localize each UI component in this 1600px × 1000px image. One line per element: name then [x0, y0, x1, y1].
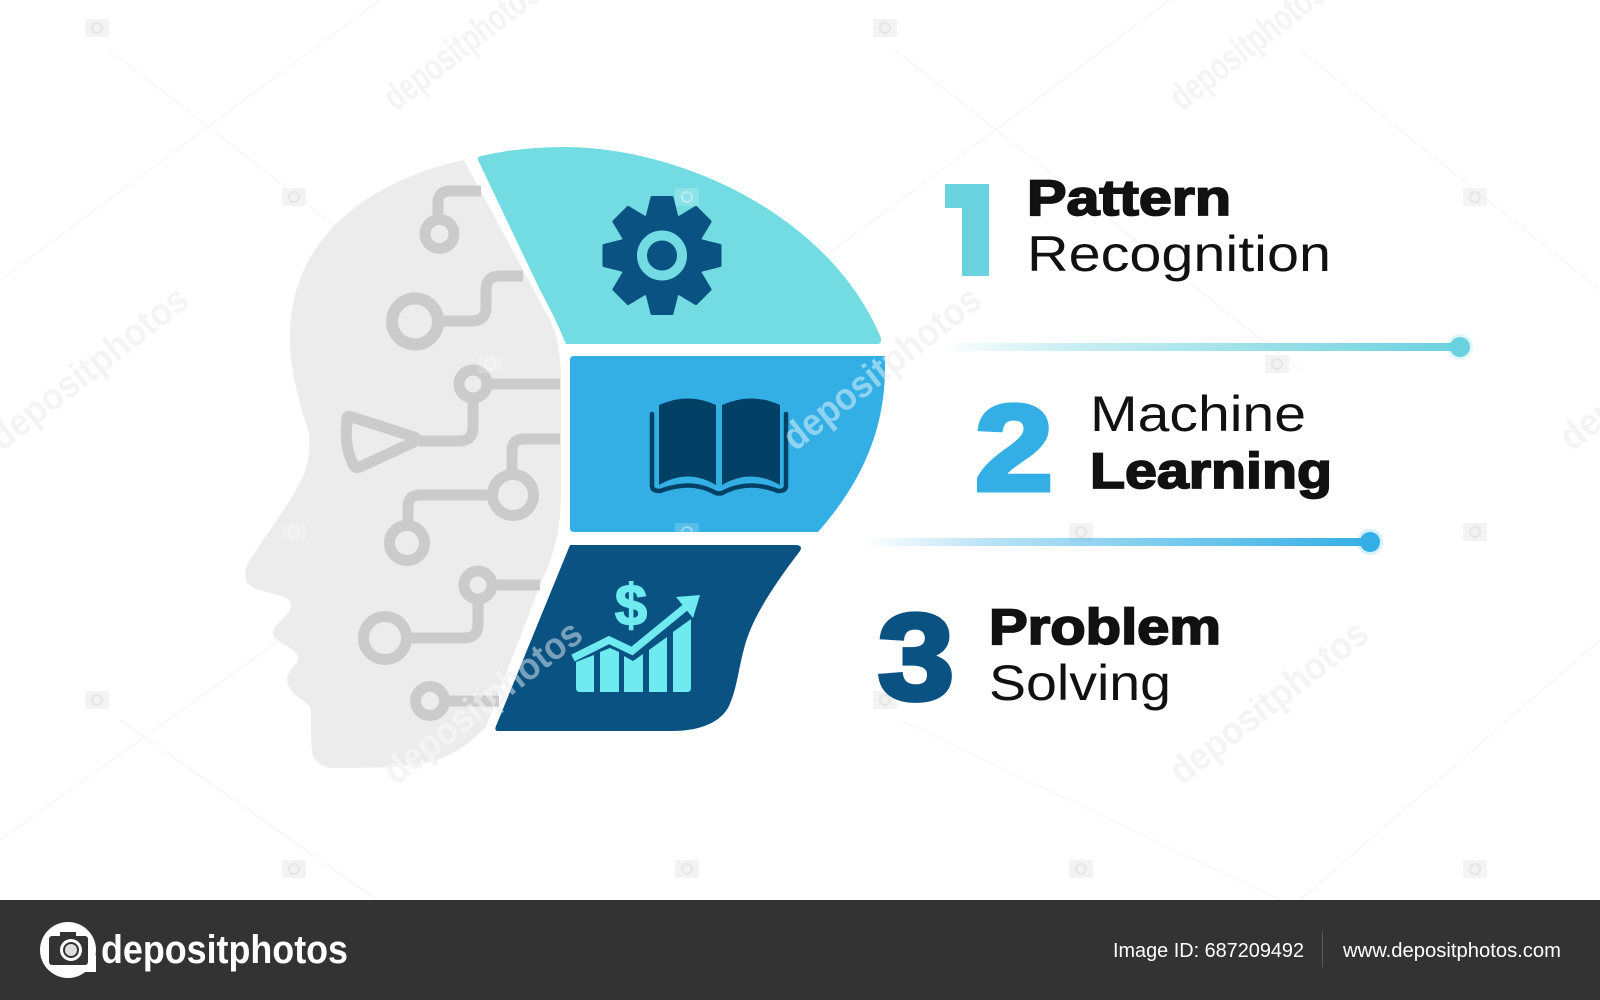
item 3: Problem Solving — [878, 589, 1221, 725]
item 1: Pattern Recognition — [945, 180, 1328, 282]
panel 1: teal — [478, 147, 881, 344]
label 2: Learning — [1090, 443, 1332, 499]
circuit traces — [346, 191, 560, 716]
label 2 — [1090, 386, 1332, 499]
label 3 — [989, 599, 1221, 711]
label 1: Recognition — [1027, 226, 1331, 282]
grey head silhouette with circuit — [245, 160, 561, 768]
website: www.depositphotos.com — [1342, 940, 1561, 962]
panel 3: dark blue — [495, 545, 801, 731]
watermark over panels: depositphotos — [775, 278, 990, 459]
number 1: 1 — [933, 161, 1005, 304]
label 1 — [1027, 170, 1331, 282]
head shape — [245, 160, 561, 768]
label 1: Pattern — [1027, 170, 1231, 226]
label 2: Machine — [1090, 386, 1306, 442]
watermark pattern: depositphotos — [1162, 612, 1377, 793]
footer logo wordmark: depositphotos — [101, 928, 348, 972]
label 3: Problem — [989, 599, 1221, 655]
watermark over panels: depositphotos — [376, 612, 591, 793]
icon: dollar growth chart — [573, 573, 700, 692]
icon: gear — [604, 198, 720, 314]
divider line 1 with dot — [936, 334, 1473, 360]
divider line 2 with dot — [862, 529, 1383, 555]
footer logo icon — [40, 922, 96, 978]
watermark pattern: depositphotos — [775, 278, 990, 459]
image id: Image ID: 687209492 — [1113, 940, 1304, 962]
icon: open book — [652, 398, 786, 494]
label 3: Solving — [989, 655, 1171, 711]
number 3: 3 — [878, 589, 954, 725]
watermark over panels — [282, 188, 990, 793]
footer bar — [0, 900, 1600, 1000]
number 2: 2 — [975, 380, 1053, 516]
watermark pattern: depositphotos — [376, 612, 591, 793]
icon: dollar growth chart: $ — [615, 573, 647, 638]
panel 2: blue — [570, 356, 885, 532]
item 2: Machine Learning — [975, 380, 1332, 516]
